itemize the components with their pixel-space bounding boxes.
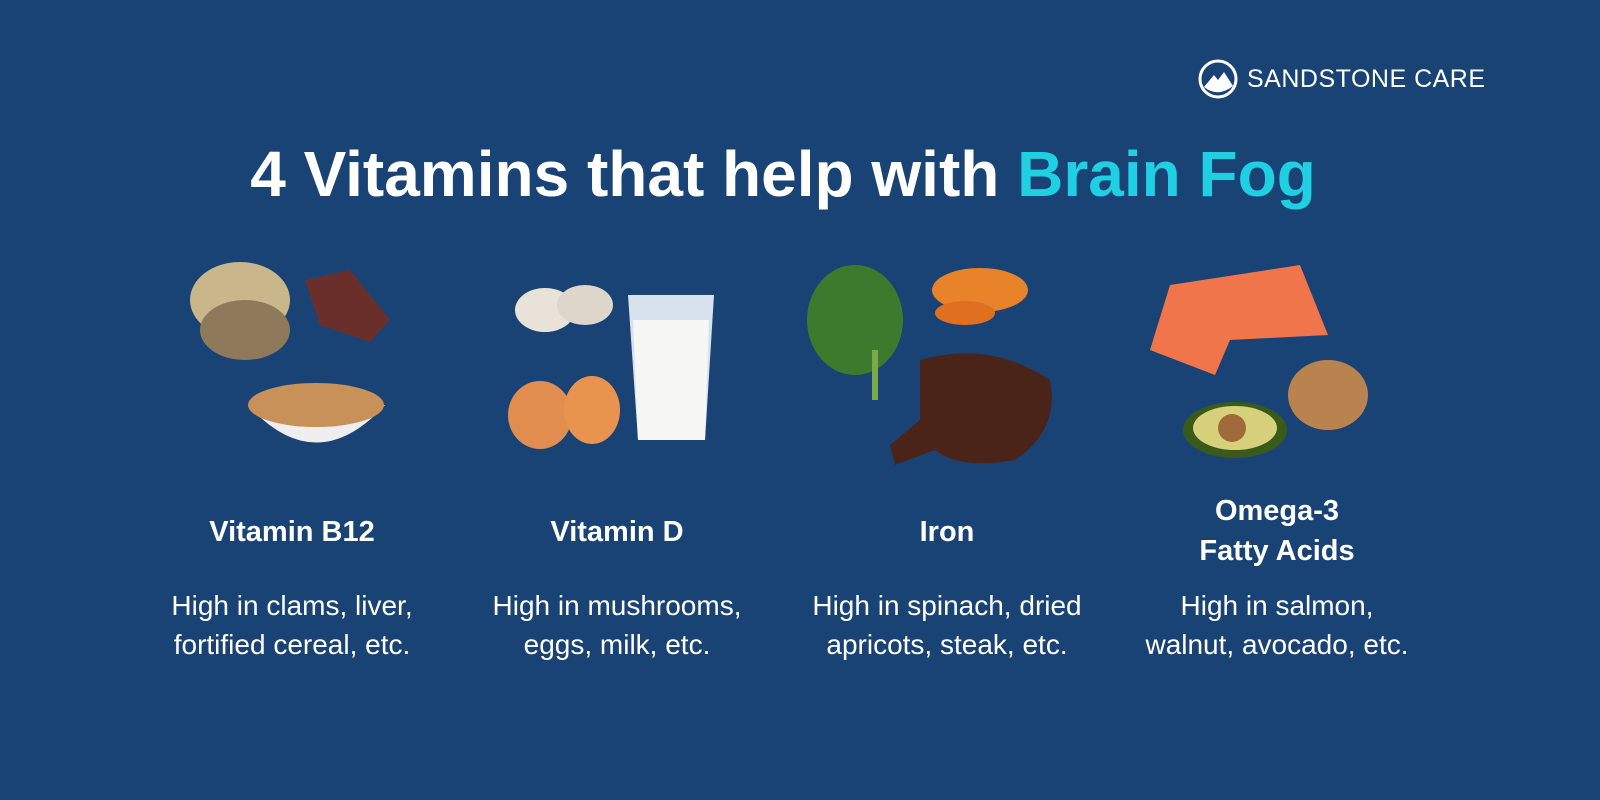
logo xyxy=(1198,60,1486,98)
icon: mushrooms xyxy=(515,285,613,332)
heading: Vitamin B12 xyxy=(209,516,375,548)
icon: liver xyxy=(305,270,390,342)
text: eggs, milk, etc. xyxy=(524,629,710,660)
icon: salmon xyxy=(1150,265,1328,375)
column: Vitamin B12 xyxy=(171,516,413,660)
text xyxy=(1145,590,1409,660)
icon: walnut xyxy=(1288,360,1368,430)
icon: apricots xyxy=(932,268,1028,325)
icon: avocado xyxy=(1183,402,1287,458)
text: High in salmon, xyxy=(1180,590,1373,621)
heading xyxy=(1199,495,1355,567)
title: 4 Vitamins that help with Brain Fog xyxy=(250,138,1316,210)
heading: Fatty Acids xyxy=(1199,535,1355,567)
heading: Vitamin D xyxy=(550,516,684,548)
text xyxy=(492,590,741,660)
text: fortified cereal, etc. xyxy=(174,629,410,660)
icon: clam xyxy=(190,262,290,360)
heading: Iron xyxy=(920,516,974,548)
icon: eggs xyxy=(508,376,620,449)
text: apricots, steak, etc. xyxy=(826,629,1068,660)
text xyxy=(171,590,413,660)
icon: spinach xyxy=(807,265,903,400)
icon: cereal bowl xyxy=(248,383,385,442)
text: walnut, avocado, etc. xyxy=(1145,629,1409,660)
text: High in spinach, dried xyxy=(812,590,1082,621)
icon: steak xyxy=(890,353,1052,465)
icon: milk glass xyxy=(628,295,714,440)
text: High in clams, liver, xyxy=(171,590,413,621)
text xyxy=(812,590,1082,660)
icon: logo mountain xyxy=(1198,60,1238,98)
column: Omega-3 xyxy=(1145,495,1409,660)
column: Iron xyxy=(812,516,1082,660)
column: Vitamin D xyxy=(492,516,741,660)
heading: Omega-3 xyxy=(1215,495,1339,527)
text: High in mushrooms, xyxy=(492,590,741,621)
logo text: SANDSTONE CARE xyxy=(1247,65,1486,93)
